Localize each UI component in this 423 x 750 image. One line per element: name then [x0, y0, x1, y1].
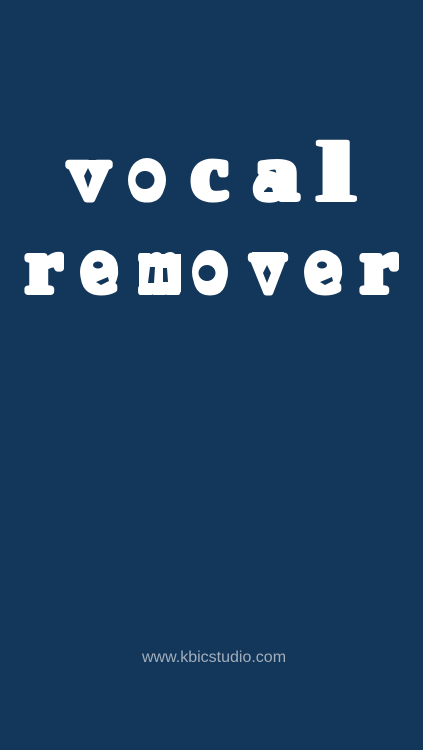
title line 1: vocal: o — [130, 132, 164, 216]
title line 1: vocal: c — [192, 132, 228, 216]
title line 2: remover: r — [361, 224, 397, 308]
website url: www.kbicstudio.com — [141, 649, 286, 666]
letter counters — [84, 168, 333, 285]
title line 1: vocal — [69, 126, 356, 219]
title line 2: remover: o — [194, 224, 226, 308]
title line 1: vocal: a — [254, 132, 298, 216]
title line 2: remover: e — [306, 224, 340, 308]
title: vocal remover — [26, 126, 397, 308]
title line 2: remover: v — [251, 224, 285, 308]
title line 1: vocal: v — [69, 132, 109, 216]
letter body fill — [72, 158, 342, 294]
title line 2: remover: e — [82, 224, 116, 308]
title line 2: remover: m — [139, 224, 179, 308]
title line 2: remover — [26, 224, 397, 308]
title line 1: vocal: l — [316, 126, 356, 219]
title line 2: remover: r — [26, 224, 62, 308]
